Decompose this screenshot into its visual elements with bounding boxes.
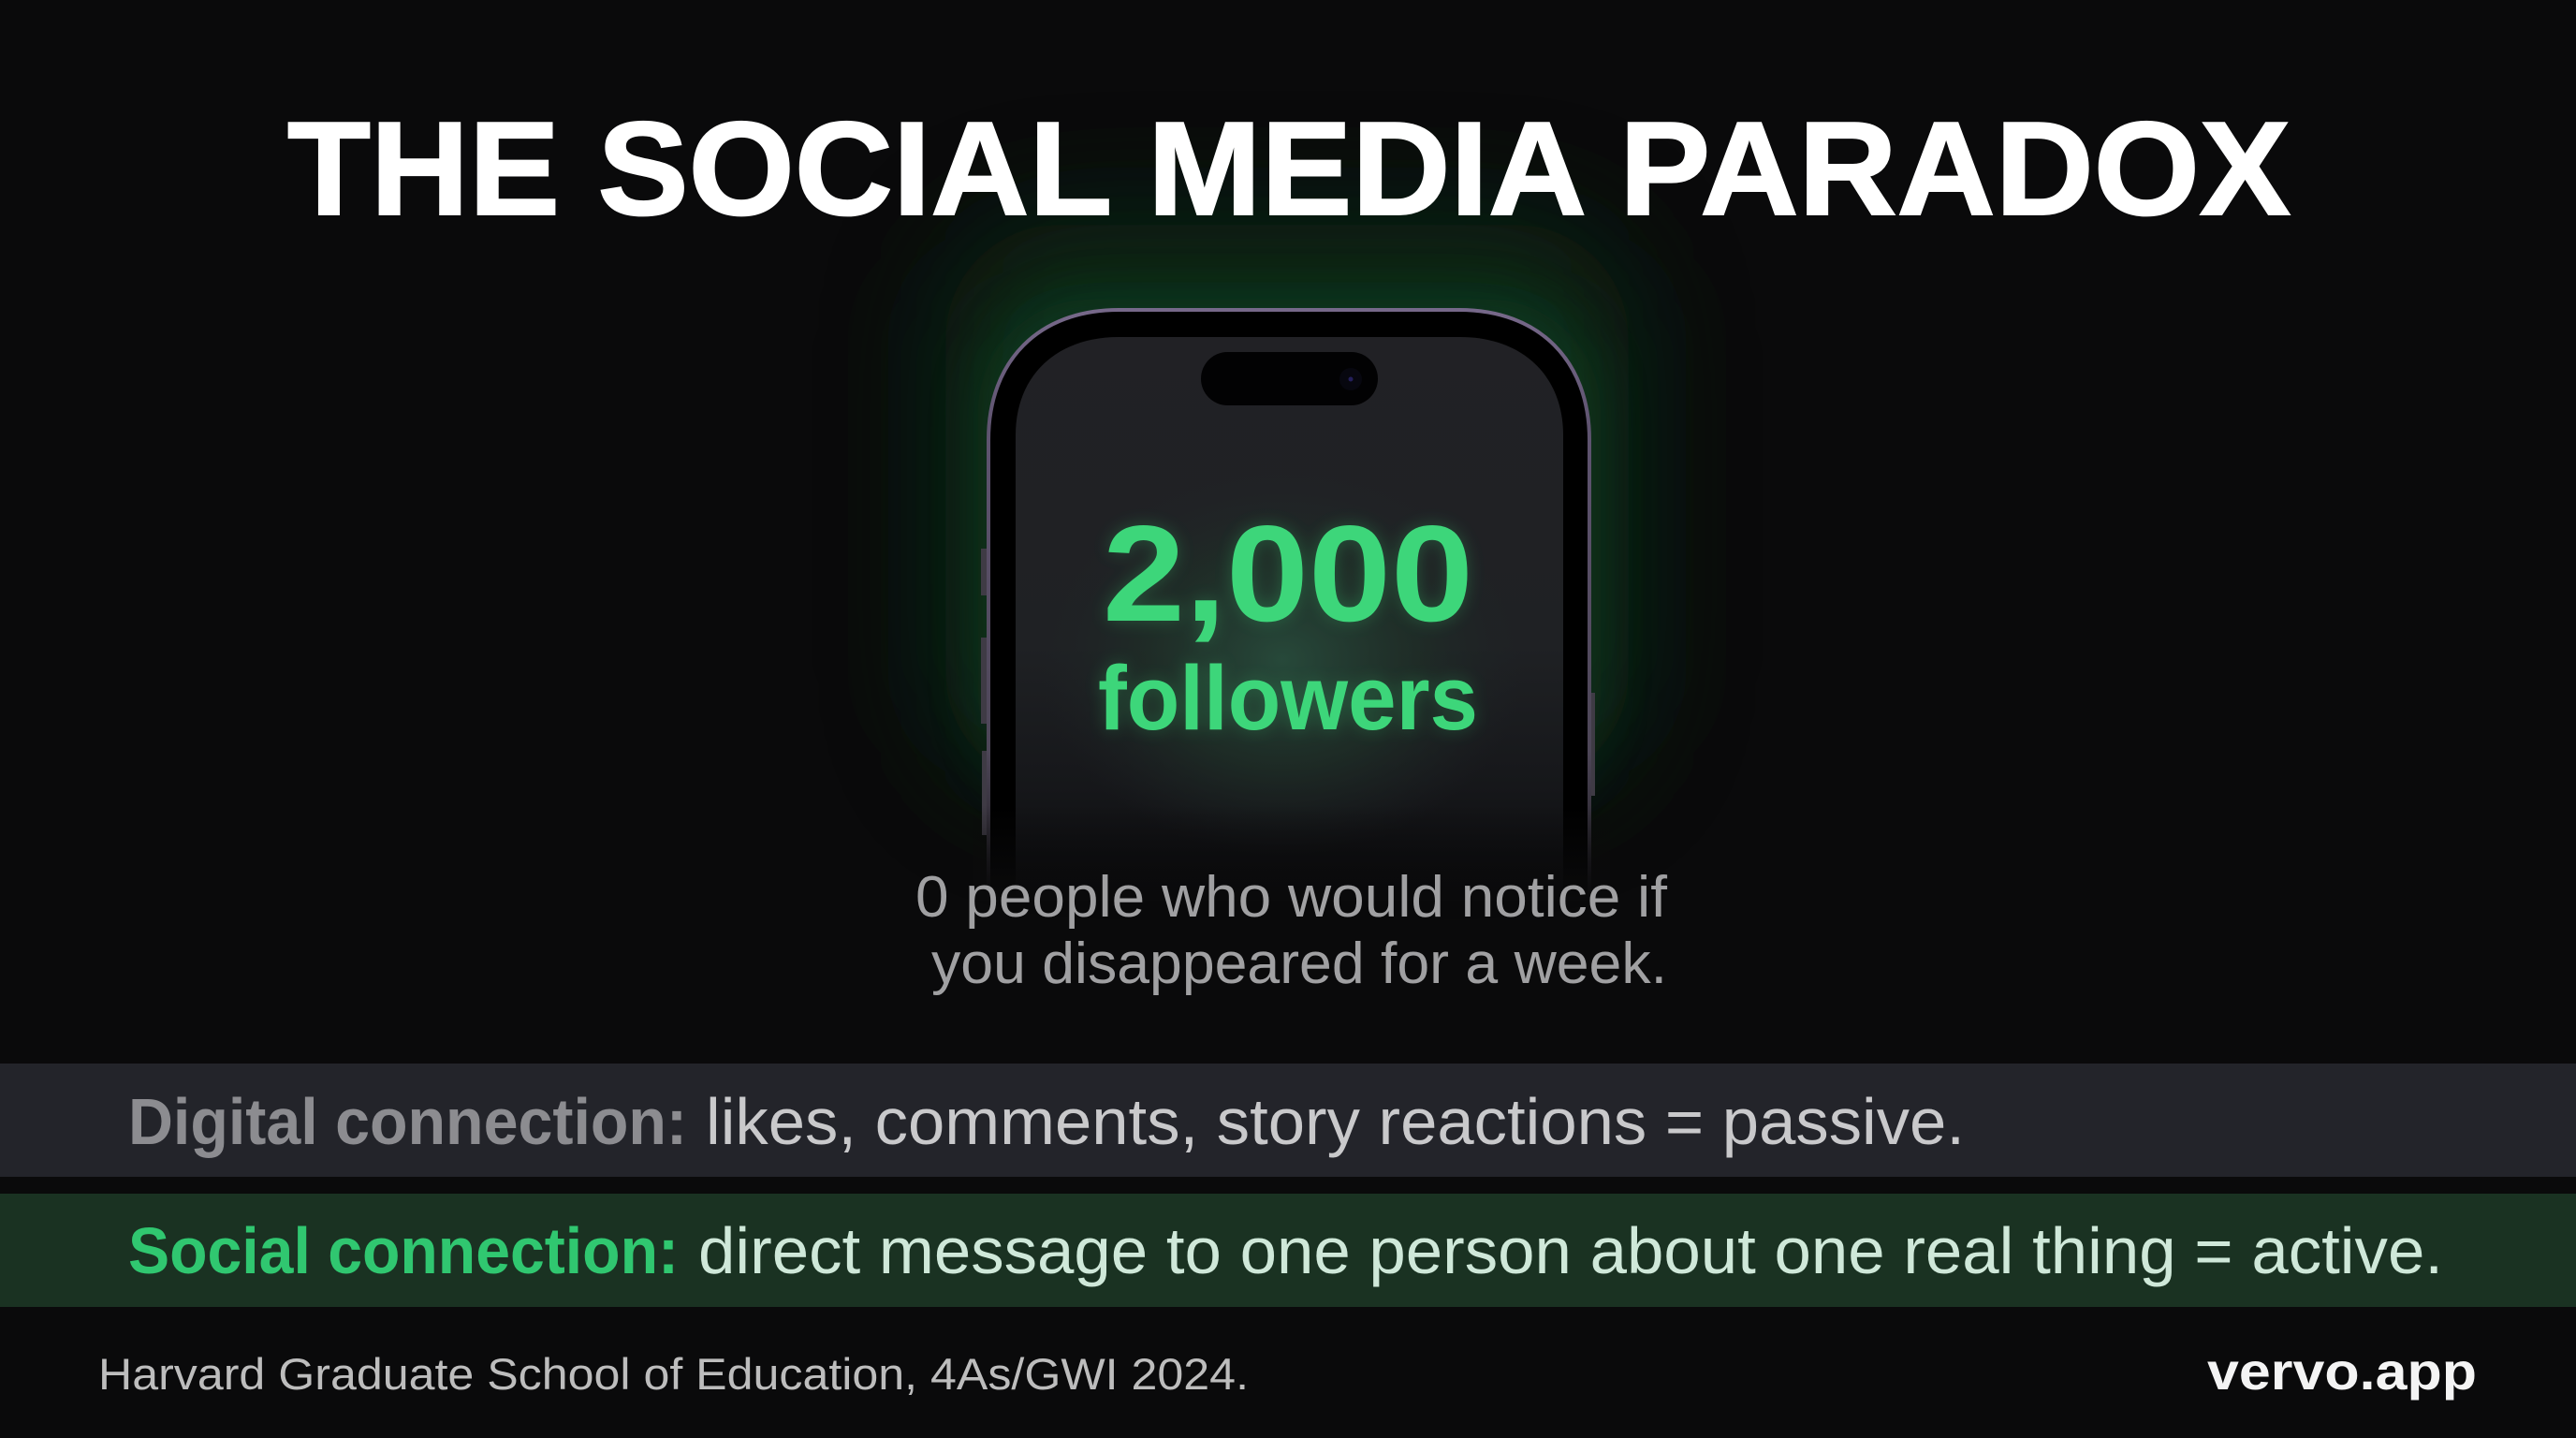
title: THE SOCIAL MEDIA PARADOX bbox=[287, 95, 2291, 243]
subtitle bbox=[915, 865, 1668, 996]
subtitle: 0 people who would notice if bbox=[915, 865, 1668, 930]
icon: smartphone with follower count bbox=[973, 310, 1610, 901]
phone frame bbox=[988, 310, 1589, 899]
panel: social connection bbox=[0, 1194, 2576, 1307]
digital description: likes, comments, story reactions = passive. bbox=[706, 1085, 1965, 1158]
panel: digital connection bbox=[0, 1064, 2576, 1177]
stat glow bbox=[1098, 497, 1478, 749]
stat label: followers: followers bbox=[1098, 647, 1478, 749]
bottom fade bbox=[973, 805, 1610, 901]
digital label: Digital connection: bbox=[128, 1085, 687, 1158]
dynamic island bbox=[1201, 352, 1378, 405]
phone side buttons bbox=[981, 549, 1595, 835]
source note: Harvard Graduate School of Education, 4As/GWI 2024. bbox=[98, 1349, 1249, 1399]
brand: vervo.app: vervo.app bbox=[2207, 1342, 2477, 1401]
screen glow bbox=[1016, 403, 1563, 899]
social label: Social connection: bbox=[128, 1214, 679, 1287]
subtitle: you disappeared for a week. bbox=[931, 932, 1667, 996]
phone green glow bbox=[945, 225, 1629, 805]
stat glow: 2,000 bbox=[1103, 497, 1473, 650]
social description: direct message to one person about one real thing = active. bbox=[698, 1214, 2443, 1287]
stat glow: followers bbox=[1098, 647, 1478, 749]
stat: 2,000: 2,000 bbox=[1103, 497, 1473, 650]
phone screen bbox=[1016, 337, 1563, 899]
